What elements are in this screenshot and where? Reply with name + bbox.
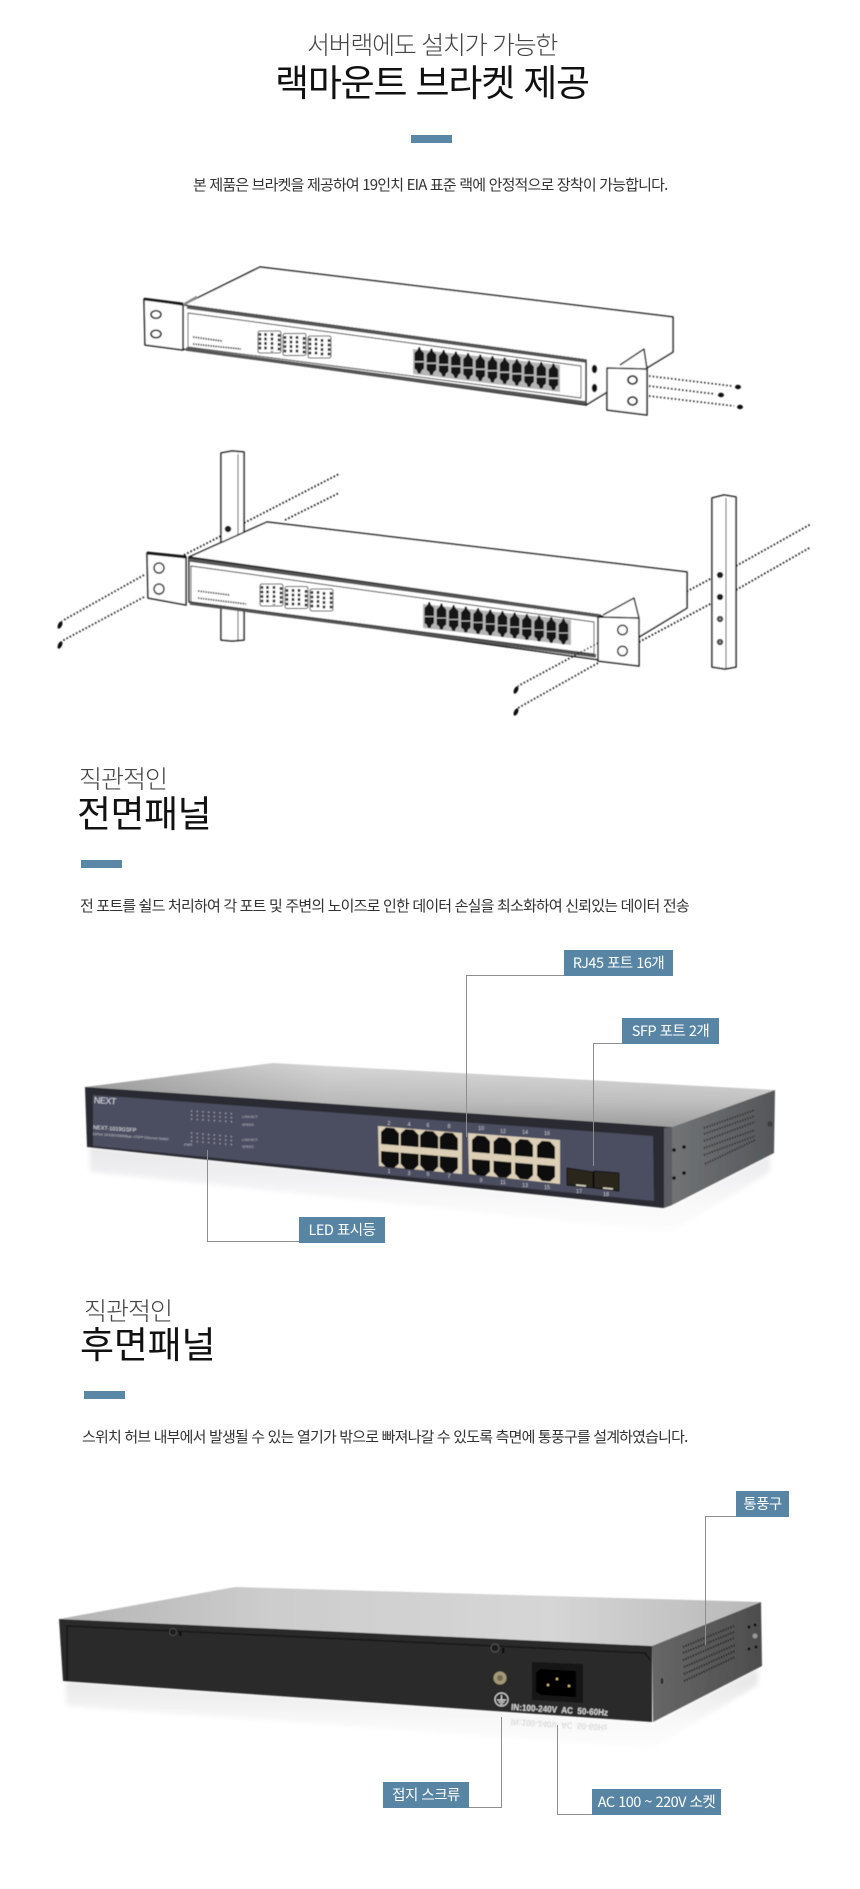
heading: rear panel xyxy=(80,1292,215,1369)
diagram: rack installation line drawing xyxy=(56,449,811,716)
LED block xyxy=(258,331,331,358)
model text block xyxy=(198,591,246,604)
LED legend: PWR xyxy=(184,1143,193,1147)
left bracket xyxy=(147,553,186,605)
label: ground screw xyxy=(383,1782,469,1808)
port numbers: 14 xyxy=(522,1130,528,1136)
right bracket xyxy=(592,349,647,415)
rear screw guides right xyxy=(639,524,811,642)
port numbers: 15 xyxy=(544,1185,550,1191)
port numbers: 11 xyxy=(500,1180,506,1186)
rear face xyxy=(59,1619,652,1722)
model caption: 10Port 10/100/1000Mbps +2SFP Ethernet Switch xyxy=(92,1132,169,1141)
port numbers: 3 xyxy=(407,1171,411,1177)
port numbers: 12 xyxy=(500,1129,506,1135)
port numbers: 18 xyxy=(603,1192,609,1198)
description: front panel: 전 포트를 쉴드 처리하여 각 포트 및 주변의 노이즈로 인한 데이터 손실을 최소화하여 신뢰있는 데이터 전송 xyxy=(80,895,689,916)
port numbers: 17 xyxy=(576,1189,582,1195)
chassis xyxy=(183,267,673,405)
screws xyxy=(649,376,743,409)
port numbers: 6 xyxy=(426,1123,430,1129)
accent bar xyxy=(84,1391,125,1399)
port numbers: 10 xyxy=(478,1126,484,1132)
model text block xyxy=(193,337,241,349)
right bracket xyxy=(598,598,639,666)
left rack post xyxy=(221,451,244,641)
port numbers: 2 xyxy=(387,1121,391,1127)
top screws xyxy=(170,1628,504,1653)
label: vent xyxy=(736,1491,789,1517)
subtitle: 서버랙에도 설치가 가능한 xyxy=(307,26,557,62)
front screws xyxy=(56,575,598,716)
LED legend: LINK/ACT xyxy=(242,1115,259,1119)
ground symbol xyxy=(495,1693,508,1706)
title: 전면패널 xyxy=(77,784,211,838)
product photo: switch rear xyxy=(58,1586,763,1733)
port numbers: 16 xyxy=(544,1131,550,1137)
ethernet ports xyxy=(423,602,571,645)
power rating: IN:100-240V AC 50-60Hz xyxy=(511,1702,609,1718)
ethernet ports xyxy=(413,347,560,392)
port numbers: 7 xyxy=(447,1174,451,1180)
port numbers: 4 xyxy=(407,1122,411,1128)
label: RJ45: RJ45 포트 16개 xyxy=(573,952,664,973)
diagram: bracket attachment line drawing xyxy=(142,266,744,416)
logo and model xyxy=(91,1095,172,1141)
label: AC socket: AC 100 ~ 220V 소켓 xyxy=(598,1791,715,1812)
label: LED xyxy=(299,1217,385,1243)
top plate xyxy=(85,1063,775,1127)
port block right xyxy=(468,1133,560,1184)
label: RJ45 xyxy=(564,950,673,976)
right rack post xyxy=(712,495,736,669)
SFP cages xyxy=(567,1168,619,1191)
port numbers xyxy=(387,1121,609,1198)
LED legend: LINK/ACT xyxy=(242,1138,259,1142)
description: rear panel: 스위치 허브 내부에서 발생될 수 있는 열기가 밖으로 빠져나갈 수 있도록 측면에 통풍구를 설계하였습니다. xyxy=(82,1426,687,1447)
reflected rating: IN:100-240V AC 50-60Hz xyxy=(511,1717,608,1733)
description: rack mount: 본 제품은 브라켓을 제공하여 19인치 EIA 표준 랙에 안정적으로 장착이 가능합니다. xyxy=(193,174,667,195)
product photo: switch front xyxy=(84,1062,776,1209)
side panel xyxy=(672,1090,775,1205)
reflection xyxy=(66,1668,758,1748)
chassis xyxy=(189,522,687,660)
title: 후면패널 xyxy=(80,1315,215,1369)
port numbers: 5 xyxy=(426,1172,430,1178)
power socket xyxy=(532,1662,583,1703)
label: SFP xyxy=(622,1018,719,1044)
label: ground screw: 접지 스크류 xyxy=(392,1784,460,1805)
LED legend: SPEED xyxy=(242,1123,254,1127)
port block left xyxy=(378,1126,462,1174)
label: SFP: SFP 포트 2개 xyxy=(632,1020,709,1041)
LED block xyxy=(260,584,333,611)
label: vent: 통풍구 xyxy=(743,1493,782,1514)
logo: NEXT xyxy=(94,1095,117,1107)
front frame xyxy=(85,1087,672,1208)
port numbers: 9 xyxy=(479,1178,483,1184)
port numbers: 1 xyxy=(387,1169,391,1175)
top plate xyxy=(59,1587,761,1646)
port numbers: 13 xyxy=(522,1183,528,1189)
model: NEXT-1019GSFP xyxy=(93,1125,137,1134)
LED legend: SPEED xyxy=(242,1145,254,1149)
heading: front panel xyxy=(77,760,211,838)
subtitle: 직관적인 xyxy=(79,760,167,796)
reflection xyxy=(90,1147,770,1232)
port numbers: 8 xyxy=(447,1124,451,1130)
rear screw guides left xyxy=(184,474,339,555)
left bracket xyxy=(144,299,183,350)
heading: rack mount section xyxy=(275,26,589,107)
ground screw xyxy=(494,1672,506,1684)
subtitle: 직관적인 xyxy=(84,1292,172,1328)
front face xyxy=(93,1095,654,1201)
label: LED: LED 표시등 xyxy=(308,1219,375,1240)
accent bar xyxy=(411,135,452,143)
side panel xyxy=(652,1602,762,1722)
LED legend xyxy=(184,1115,259,1149)
accent bar xyxy=(81,860,122,868)
LED indicators xyxy=(191,1111,236,1145)
title: 랙마운트 브라켓 제공 xyxy=(275,53,589,107)
rear lip xyxy=(66,1626,650,1660)
